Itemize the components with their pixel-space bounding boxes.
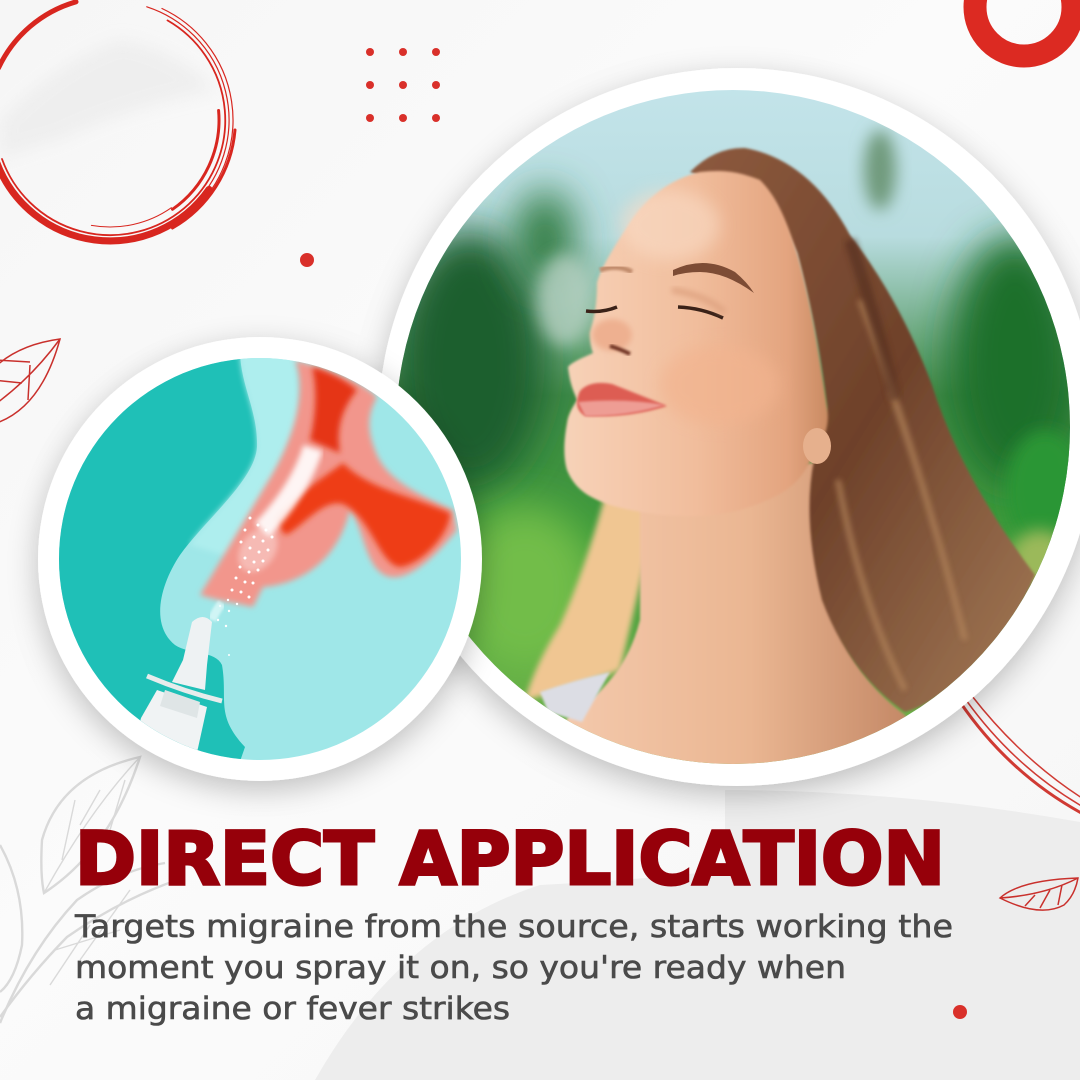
spray particles — [217, 516, 274, 656]
small circle: nasal spray illustration — [38, 337, 482, 781]
photo — [390, 85, 1080, 775]
spray bottle — [140, 617, 223, 750]
ear — [803, 428, 831, 464]
description text: a migraine or fever strikes — [75, 991, 510, 1027]
description text: moment you spray it on, so you're ready when — [75, 950, 846, 986]
face — [564, 171, 828, 516]
eyebrow — [673, 263, 754, 293]
illustration — [50, 350, 470, 770]
red dot lower — [953, 1005, 967, 1019]
grey leaves, bottom left — [0, 757, 177, 1023]
title: DIRECT APPLICATION — [75, 817, 945, 902]
dress strap — [540, 672, 610, 722]
description text: Targets migraine from the source, starts working the — [74, 909, 953, 945]
large photo circle: woman breathing — [378, 68, 1080, 786]
lips — [577, 383, 667, 416]
red ring, top right — [975, 0, 1073, 56]
shoulders and chest — [565, 462, 907, 764]
back hair — [690, 148, 1035, 712]
decorative red brush ring, top left — [0, 2, 235, 243]
blonde hair back — [524, 500, 642, 702]
red dot upper — [300, 253, 314, 267]
red leaf, left — [0, 339, 60, 425]
red leaf, right — [1000, 878, 1078, 910]
red brush arcs, bottom right — [960, 696, 1080, 815]
dot grid — [366, 48, 440, 122]
red nasal cavity — [200, 360, 457, 656]
nostril — [610, 346, 630, 354]
white ring — [378, 68, 1080, 786]
closed eyes — [586, 307, 723, 318]
description text — [74, 909, 953, 1027]
white ring — [38, 337, 482, 781]
